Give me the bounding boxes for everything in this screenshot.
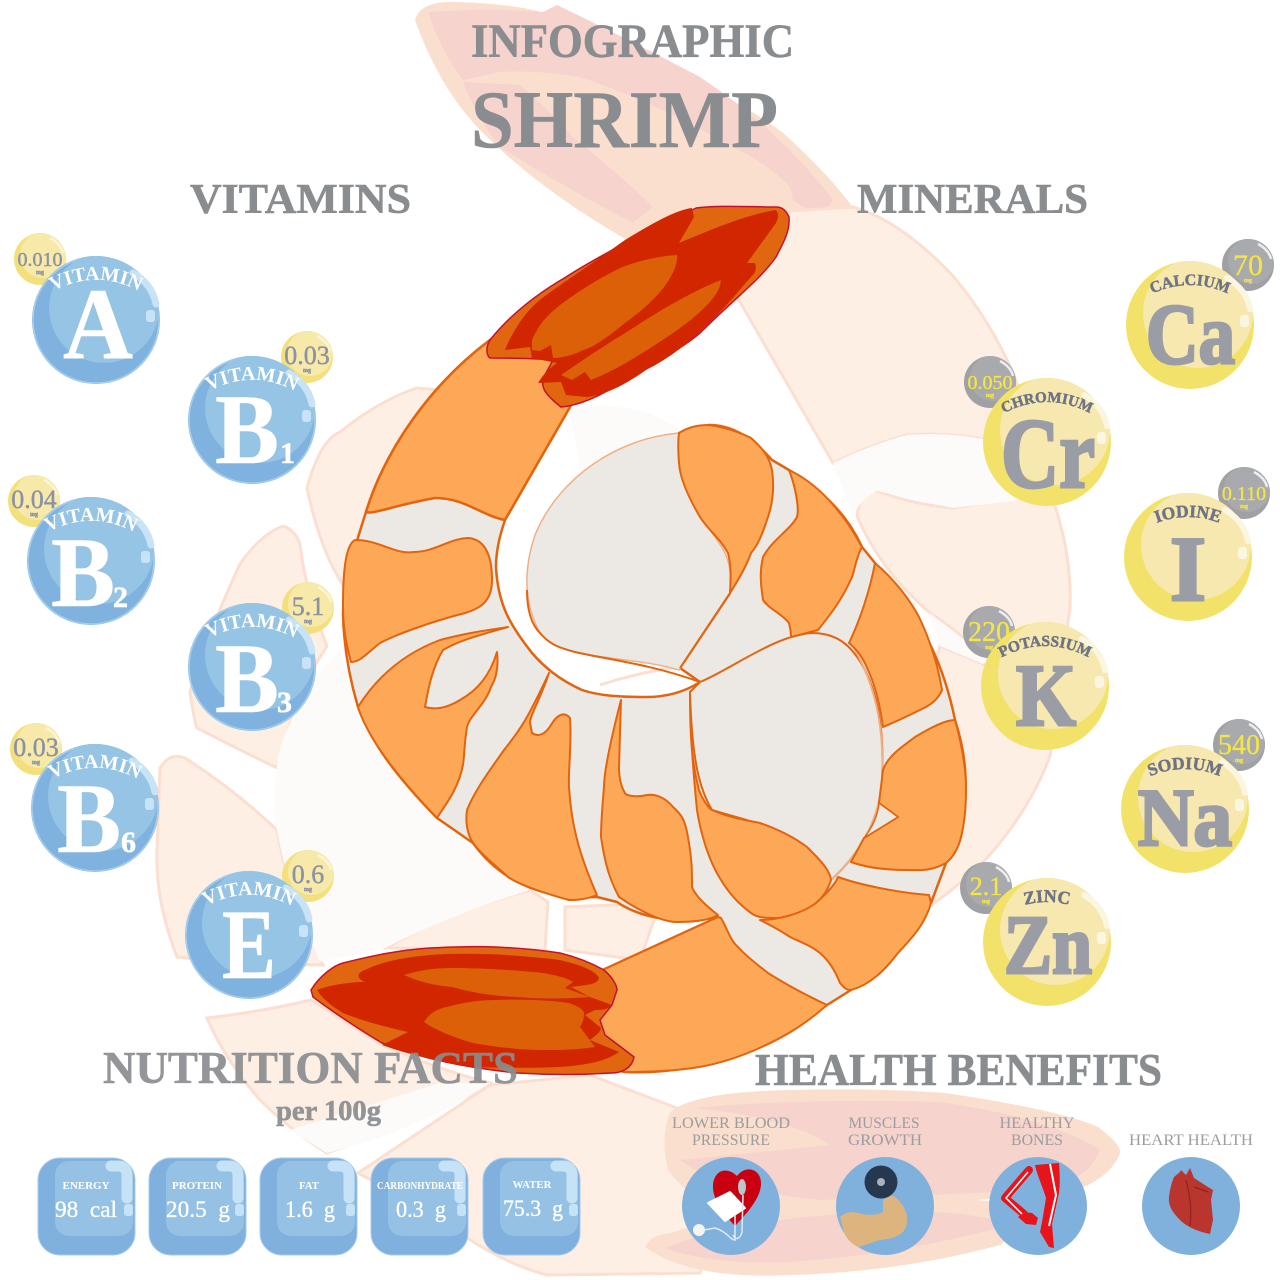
panel: nutrition cards [38,1158,580,1255]
mineral chromium: CHROMIUM [1002,392,1094,414]
vitamin E: VITAMIN [200,882,297,906]
vitamin B1: mg [303,368,311,374]
mineral zinc: Zn [1004,899,1092,992]
vitamin B6: B [57,763,121,874]
mineral zinc [960,862,1111,1006]
card: carbohydrate [371,1158,468,1255]
panel: health benefits [672,1115,1253,1255]
heading: health benefits: HEALTH BENEFITS [755,1044,1162,1095]
vitamin B2: VITAMIN [42,508,139,532]
benefit: muscles growth: MUSCLES [848,1115,920,1132]
vitamin B6: 6 [121,826,136,859]
mineral calcium [1126,239,1274,389]
mineral chromium [964,356,1111,509]
background: top tail [415,2,857,240]
benefit: healthy bones [989,1115,1087,1255]
card: energy: ENERGY [62,1180,110,1192]
vitamin B2 [8,475,155,628]
shrimp small vein leaf [864,803,898,838]
vitamin A: VITAMIN [48,266,144,290]
card: fat: 1.6 g [285,1197,335,1222]
mineral chromium: 0.050 [968,372,1012,394]
mineral potassium: mg [985,645,993,651]
mineral zinc: ZINC [1024,890,1070,905]
vitamin B1 [188,331,333,485]
card: water: WATER [512,1179,553,1191]
vitamin A: 0.010 [18,249,62,271]
vitamin B2: 0.04 [11,485,57,514]
panel: vitamins [8,233,334,1000]
vitamin B2: mg [30,512,38,518]
card: carbohydrate: CARBONHYDRATE [377,1180,463,1192]
vitamin E [185,850,334,1000]
background: bottom tail [645,1089,1120,1276]
card: energy [38,1158,135,1255]
vitamin B6: mg [32,760,40,766]
card: fat: FAT [299,1180,320,1192]
background: outer body segments [157,207,1070,1275]
vitamin B1: 0.03 [284,341,330,370]
vitamin B3 [188,582,334,734]
card: protein [149,1158,246,1255]
vitamin E: E [222,889,276,1000]
vitamin B6 [10,723,159,874]
benefit: lower blood pressure: LOWER BLOOD [672,1115,790,1132]
vitamin E: 0.6 [292,860,324,889]
mineral zinc: 2.1 [970,872,1002,901]
tail: bottom fan [311,947,634,1074]
shrimp large grey lobe [690,633,882,880]
mineral potassium: POTASSIUM [997,636,1093,658]
vitamin B1: 1 [280,437,295,470]
mineral chromium: Cr [1001,398,1095,509]
vitamin B2: 2 [113,581,128,614]
benefit: muscles growth: GROWTH [848,1132,922,1149]
mineral iodine: mg [1240,504,1248,510]
mineral calcium: Ca [1146,286,1235,382]
mineral sodium: 540 [1218,730,1260,761]
benefit: lower blood pressure [672,1115,790,1255]
mineral potassium: K [1016,648,1076,745]
mineral sodium: Na [1138,772,1232,863]
mineral potassium: 220 [968,617,1010,648]
heading: nutrition facts: NUTRITION FACTS [103,1042,518,1093]
card: protein: PROTEIN [172,1180,222,1192]
vitamin A: A [63,268,133,381]
vitamin B3: mg [304,619,312,625]
mineral potassium [963,606,1109,750]
mineral calcium: 70 [1233,249,1263,282]
heading: nutrition facts [103,1042,518,1127]
vitamin B6: 0.03 [13,733,59,762]
shrimp orange shell segments [343,320,966,1072]
heading: vitamins: VITAMINS [190,177,411,223]
vitamin B3: 5.1 [292,592,324,621]
mineral iodine: IODINE [1153,505,1222,523]
card: energy: 98 cal [55,1197,117,1222]
mineral iodine: I [1170,518,1206,620]
mineral iodine [1124,467,1270,621]
mineral zinc: mg [982,899,990,905]
vitamin B3: VITAMIN [204,614,300,638]
heading: minerals: MINERALS [857,177,1088,223]
mineral chromium: mg [986,393,994,399]
card: fat [260,1158,357,1255]
benefit: heart health [1129,1132,1253,1255]
vitamin B3: B [215,623,279,734]
card: water [483,1158,580,1255]
mineral iodine: 0.110 [1222,483,1266,505]
card: carbohydrate: 0.3 g [396,1197,446,1222]
benefit: muscles growth [836,1115,934,1255]
mineral sodium [1121,719,1265,873]
vitamin A: mg [36,270,44,276]
card: protein: 20.5 g [166,1197,231,1222]
vitamin B1: VITAMIN [204,366,300,390]
benefit: healthy bones: HEALTHY [1000,1115,1075,1132]
vitamin B3: 3 [277,686,292,719]
title [471,15,794,165]
main shrimp illustration [311,206,966,1075]
shrimp head lobe [527,433,730,670]
title: SHRIMP [471,74,778,165]
mineral sodium: SODIUM [1148,757,1224,776]
background faded shrimp [157,2,1120,1276]
vitamin B6: VITAMIN [46,754,143,778]
mineral calcium: CALCIUM [1150,274,1232,294]
benefit: heart health: HEART HEALTH [1129,1132,1253,1149]
tail: top fan [487,206,789,407]
benefit: healthy bones: BONES [1011,1132,1063,1149]
mineral sodium: mg [1235,758,1243,764]
panel: minerals [960,239,1274,1006]
benefit: lower blood pressure: PRESSURE [692,1132,770,1149]
card: water: 75.3 g [503,1196,563,1221]
vitamin B1: B [215,374,279,485]
mineral calcium: mg [1244,278,1252,284]
shrimp body base [343,320,966,1072]
background: off-white inner disc and gaps [274,406,1020,1153]
vitamin B2: B [51,517,115,628]
vitamin A [14,233,160,384]
vitamin E: mg [304,887,312,893]
heading: nutrition facts: per 100g [276,1096,381,1127]
title: INFOGRAPHIC [471,15,794,68]
